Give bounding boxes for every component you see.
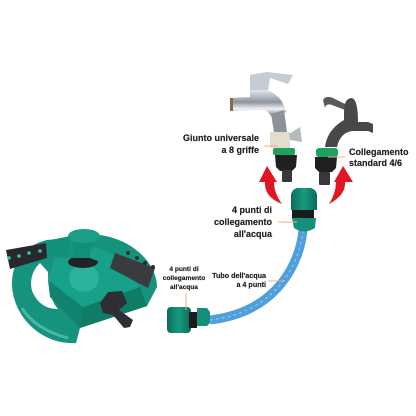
label: hose: Tubo dell'acqua <box>212 271 267 280</box>
label: standard connection: Collegamento <box>349 147 409 157</box>
label: 4 water connection points: 4 punti di <box>232 205 272 215</box>
sprinkler <box>6 229 157 343</box>
base front side <box>48 280 83 328</box>
blue hose <box>210 230 303 320</box>
label: small water connection points: collegamento <box>163 275 205 282</box>
arrow: right red <box>329 166 353 204</box>
hub <box>68 229 100 268</box>
arrow: left red <box>259 166 282 204</box>
sprinkler ring base <box>12 235 157 343</box>
label: universal joint: a 8 griffe <box>221 145 259 155</box>
label: 4 water connection points: all'acqua <box>234 229 273 239</box>
label: standard connection: standard 4/6 <box>349 158 402 168</box>
left faucet connector <box>273 148 297 182</box>
reflection <box>69 264 99 292</box>
dark faucet <box>323 97 373 147</box>
top hose connector <box>291 188 317 232</box>
label: 4 water connection points: collegamento <box>214 217 272 227</box>
left arm <box>46 236 70 256</box>
base right side <box>80 287 147 328</box>
label: small water connection points: 4 punti di <box>169 266 199 273</box>
hose adapter <box>100 291 133 328</box>
hose assembly <box>167 148 338 333</box>
bottom connector <box>167 307 210 333</box>
chrome faucet <box>230 72 302 148</box>
right arm <box>90 247 115 265</box>
ring highlight <box>22 308 68 338</box>
right faucet connector <box>315 148 338 185</box>
leader lines <box>186 146 345 310</box>
label: hose: a 4 punti <box>236 280 266 289</box>
label: universal joint: Giunto universale <box>183 133 259 143</box>
base top face <box>48 258 140 307</box>
label: small water connection points: all'acqua <box>170 284 198 291</box>
